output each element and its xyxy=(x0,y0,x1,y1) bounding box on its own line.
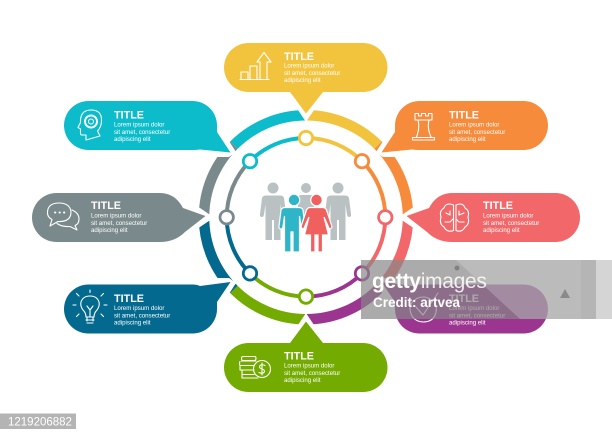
teal bubble shape xyxy=(64,101,230,152)
panel: red right callout xyxy=(406,193,580,242)
gray bubble shape xyxy=(32,193,205,242)
blue text block: sit amet, consectetur xyxy=(114,312,170,320)
green bubble shape xyxy=(224,322,388,392)
panel: blue lower-left callout xyxy=(64,282,230,334)
purple text block: sit amet, consectetur xyxy=(449,312,505,320)
purple text block: Lorem ipsum dolor xyxy=(449,305,499,312)
red text block: TITLE xyxy=(483,200,513,212)
red bubble shape xyxy=(406,193,580,242)
teal text block: adipiscing elit xyxy=(114,136,151,143)
panel: teal upper-left callout xyxy=(64,101,230,152)
icon: brain xyxy=(440,204,469,231)
red text block: adipiscing elit xyxy=(483,227,520,234)
icon: light bulb xyxy=(73,290,107,323)
inner ring with nodes xyxy=(210,122,402,313)
yellow text block: adipiscing elit xyxy=(284,77,321,84)
red text block: sit amet, consectetur xyxy=(483,220,539,227)
icon: chess rook xyxy=(412,114,434,140)
icon: growth bars with arrow xyxy=(240,52,271,80)
orange text block: TITLE xyxy=(449,110,479,122)
purple bubble shape xyxy=(382,282,548,334)
watermark credit: Credit: artvea xyxy=(373,295,461,310)
panel: yellow top callout xyxy=(224,43,387,114)
yellow text block: TITLE xyxy=(284,51,314,63)
green text block: TITLE xyxy=(284,350,314,362)
orange text block: adipiscing elit xyxy=(449,136,486,143)
blue text block: TITLE xyxy=(114,293,144,305)
gray text block: adipiscing elit xyxy=(91,227,128,234)
panel: orange upper-right callout xyxy=(382,101,548,152)
gray text block: Lorem ipsum dolor xyxy=(91,212,141,220)
gray text block: sit amet, consectetur xyxy=(91,220,147,227)
panel: purple lower-right callout xyxy=(382,282,548,334)
people group icon xyxy=(260,182,351,252)
purple text block: adipiscing elit xyxy=(449,320,486,326)
purple text block: TITLE xyxy=(449,293,479,305)
blue bubble shape xyxy=(64,282,230,334)
yellow bubble shape xyxy=(224,43,387,114)
yellow text block: Lorem ipsum dolor xyxy=(284,62,334,70)
icon: check badge xyxy=(410,293,438,322)
panel: green bottom callout xyxy=(224,322,388,392)
green text block: adipiscing elit xyxy=(284,377,321,384)
orange bubble shape xyxy=(382,101,548,152)
watermark wordmark: gettyimages xyxy=(372,270,487,293)
icon: chat bubbles xyxy=(47,203,79,230)
teal text block: Lorem ipsum dolor xyxy=(114,122,164,128)
outer segmented ring xyxy=(183,94,429,340)
orange text block: Lorem ipsum dolor xyxy=(449,122,499,128)
blue text block: Lorem ipsum dolor xyxy=(114,305,164,312)
icon: coins with dollar xyxy=(240,356,270,378)
image id tag: 1219206882 xyxy=(8,416,72,428)
red text block: Lorem ipsum dolor xyxy=(483,212,533,220)
image id tag xyxy=(0,414,76,429)
teal text block: TITLE xyxy=(114,110,144,122)
teal text block: sit amet, consectetur xyxy=(114,129,170,136)
green text block: Lorem ipsum dolor xyxy=(284,362,334,370)
panel: gray left callout xyxy=(32,193,205,242)
blue text block: adipiscing elit xyxy=(114,320,151,326)
green text block: sit amet, consectetur xyxy=(284,370,340,377)
yellow text block: sit amet, consectetur xyxy=(284,70,340,77)
orange text block: sit amet, consectetur xyxy=(449,129,505,136)
watermark: getty images overlay xyxy=(361,260,612,319)
gray text block: TITLE xyxy=(91,200,121,212)
icon: head with gear xyxy=(78,110,102,140)
